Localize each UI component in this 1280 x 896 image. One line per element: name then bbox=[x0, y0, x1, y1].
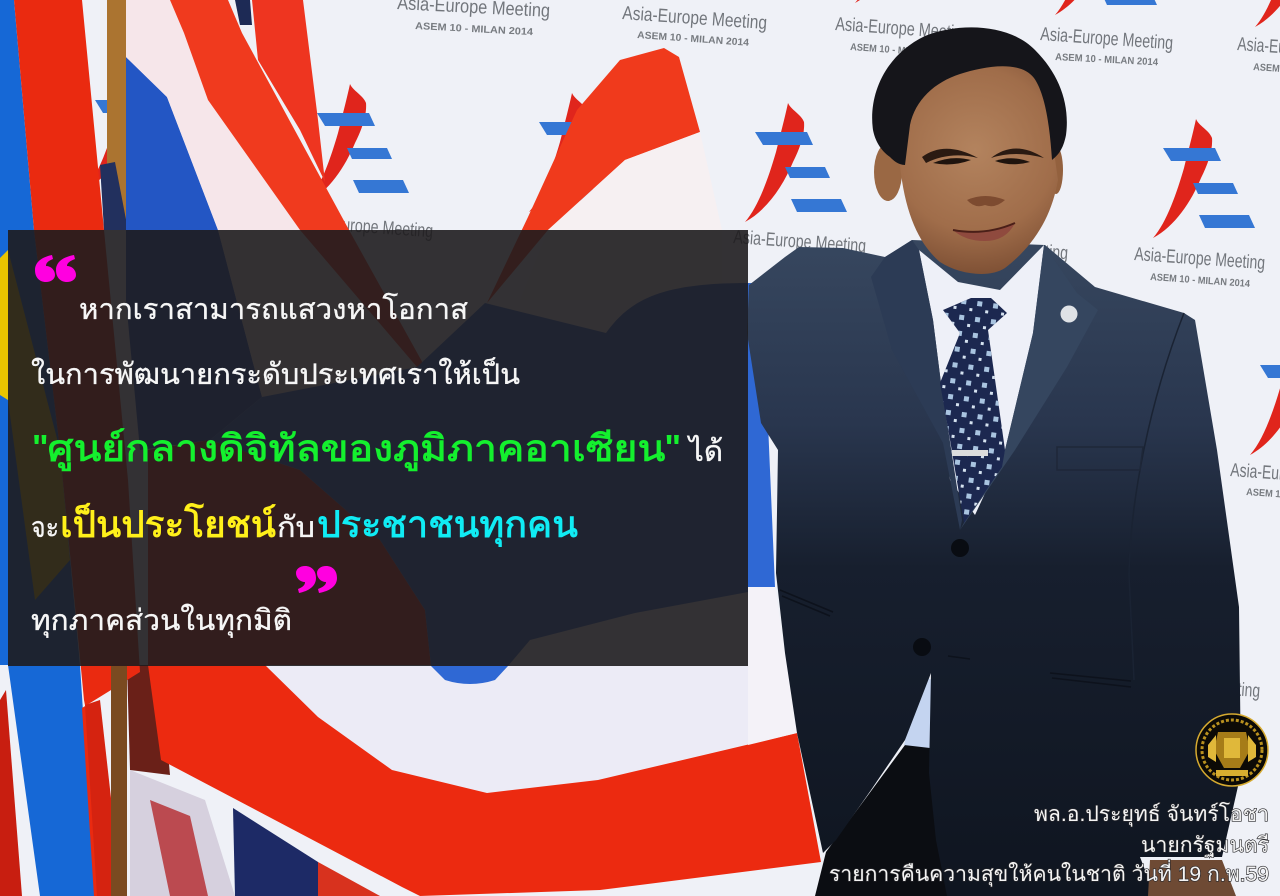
tie bar bbox=[952, 450, 988, 456]
mouth bbox=[953, 223, 1015, 241]
background: Asia-Europe Meeting backdrop: Asia-Europe Meeting bbox=[622, 3, 768, 34]
right lapel bbox=[960, 245, 1098, 530]
green highlight: "ศูนย์กลางดิจิทัลของภูมิภาคอาเซียน" bbox=[33, 428, 680, 471]
face bbox=[900, 57, 1058, 274]
quote line 3 bbox=[33, 428, 723, 471]
necktie bbox=[940, 298, 1007, 523]
background: Asia-Europe Meeting backdrop: ASEM 10 - MILAN 2014 bbox=[1055, 52, 1159, 68]
yellow highlight: เป็นประโยชน์ bbox=[60, 501, 276, 545]
eyes bbox=[933, 158, 971, 164]
ears bbox=[874, 143, 902, 201]
lapel pin bbox=[1060, 306, 1078, 322]
flags on the left bbox=[0, 0, 425, 896]
shirt bbox=[919, 245, 1044, 515]
Thai flag held up bbox=[148, 48, 821, 896]
background: Asia-Europe Meeting backdrop: Asia-Europe Meeting bbox=[300, 212, 434, 242]
quote line 2: ในการพัฒนายกระดับประเทศเราให้เป็น bbox=[31, 356, 520, 391]
background: Asia-Europe Meeting backdrop: ASEM 10 - MILAN 2014 bbox=[1150, 272, 1251, 290]
word: ได้ bbox=[687, 434, 723, 468]
background: Asia-Europe Meeting backdrop: ASEM 10 - MILAN 2014 bbox=[637, 30, 750, 49]
background: Asia-Europe Meeting backdrop: Asia-Europe Meeting bbox=[835, 14, 971, 44]
suit jacket bbox=[747, 240, 1241, 896]
background: Asia-Europe Meeting backdrop: ASEM 10 - MILAN 2014 bbox=[850, 42, 951, 60]
pockets bbox=[780, 447, 1143, 687]
emblem seal bbox=[1196, 714, 1268, 786]
hand bbox=[1148, 860, 1236, 896]
attribution: programme and date: รายการคืนความสุขให้คนในชาติ วันที่ 19 ก.พ.59 bbox=[829, 859, 1269, 887]
background: Asia-Europe Meeting backdrop: Asia-Europe Meeting bbox=[1040, 24, 1174, 54]
quote line 4 bbox=[31, 501, 578, 547]
attribution: name: พล.อ.ประยุทธ์ จันทร์โอชา bbox=[1034, 802, 1269, 827]
shirt hem bbox=[904, 675, 932, 748]
quote line 5: ทุกภาคส่วนในทุกมิติ bbox=[31, 603, 292, 638]
background: Asia-Europe Meeting backdrop: Asia-Europe Meeting bbox=[733, 227, 867, 257]
eyebrows bbox=[922, 149, 978, 163]
dark quote panel bbox=[8, 230, 748, 666]
opening quotation mark bbox=[35, 255, 76, 282]
prefix: จะ bbox=[31, 512, 59, 544]
trousers bbox=[815, 745, 950, 896]
left lapel bbox=[871, 240, 962, 530]
background: Asia-Europe Meeting backdrop: Asia-Europe Meeting bbox=[935, 234, 1069, 264]
nose bbox=[967, 196, 1005, 206]
gap at sleeve bbox=[1129, 575, 1148, 860]
attribution: title: นายกรัฐมนตรี bbox=[1141, 834, 1269, 857]
closing quotation mark bbox=[296, 566, 337, 593]
cyan highlight: ประชาชนทุกคน bbox=[317, 504, 578, 547]
background: Asia-Europe Meeting backdrop: ASEM 10 - MILAN 2014 bbox=[415, 21, 534, 38]
quote line 1: หากเราสามารถแสวงหาโอกาส bbox=[79, 292, 468, 326]
connector: กับ bbox=[277, 512, 315, 544]
hair bbox=[872, 27, 1067, 165]
prime minister portrait bbox=[747, 27, 1241, 896]
jacket buttons bbox=[913, 539, 969, 656]
